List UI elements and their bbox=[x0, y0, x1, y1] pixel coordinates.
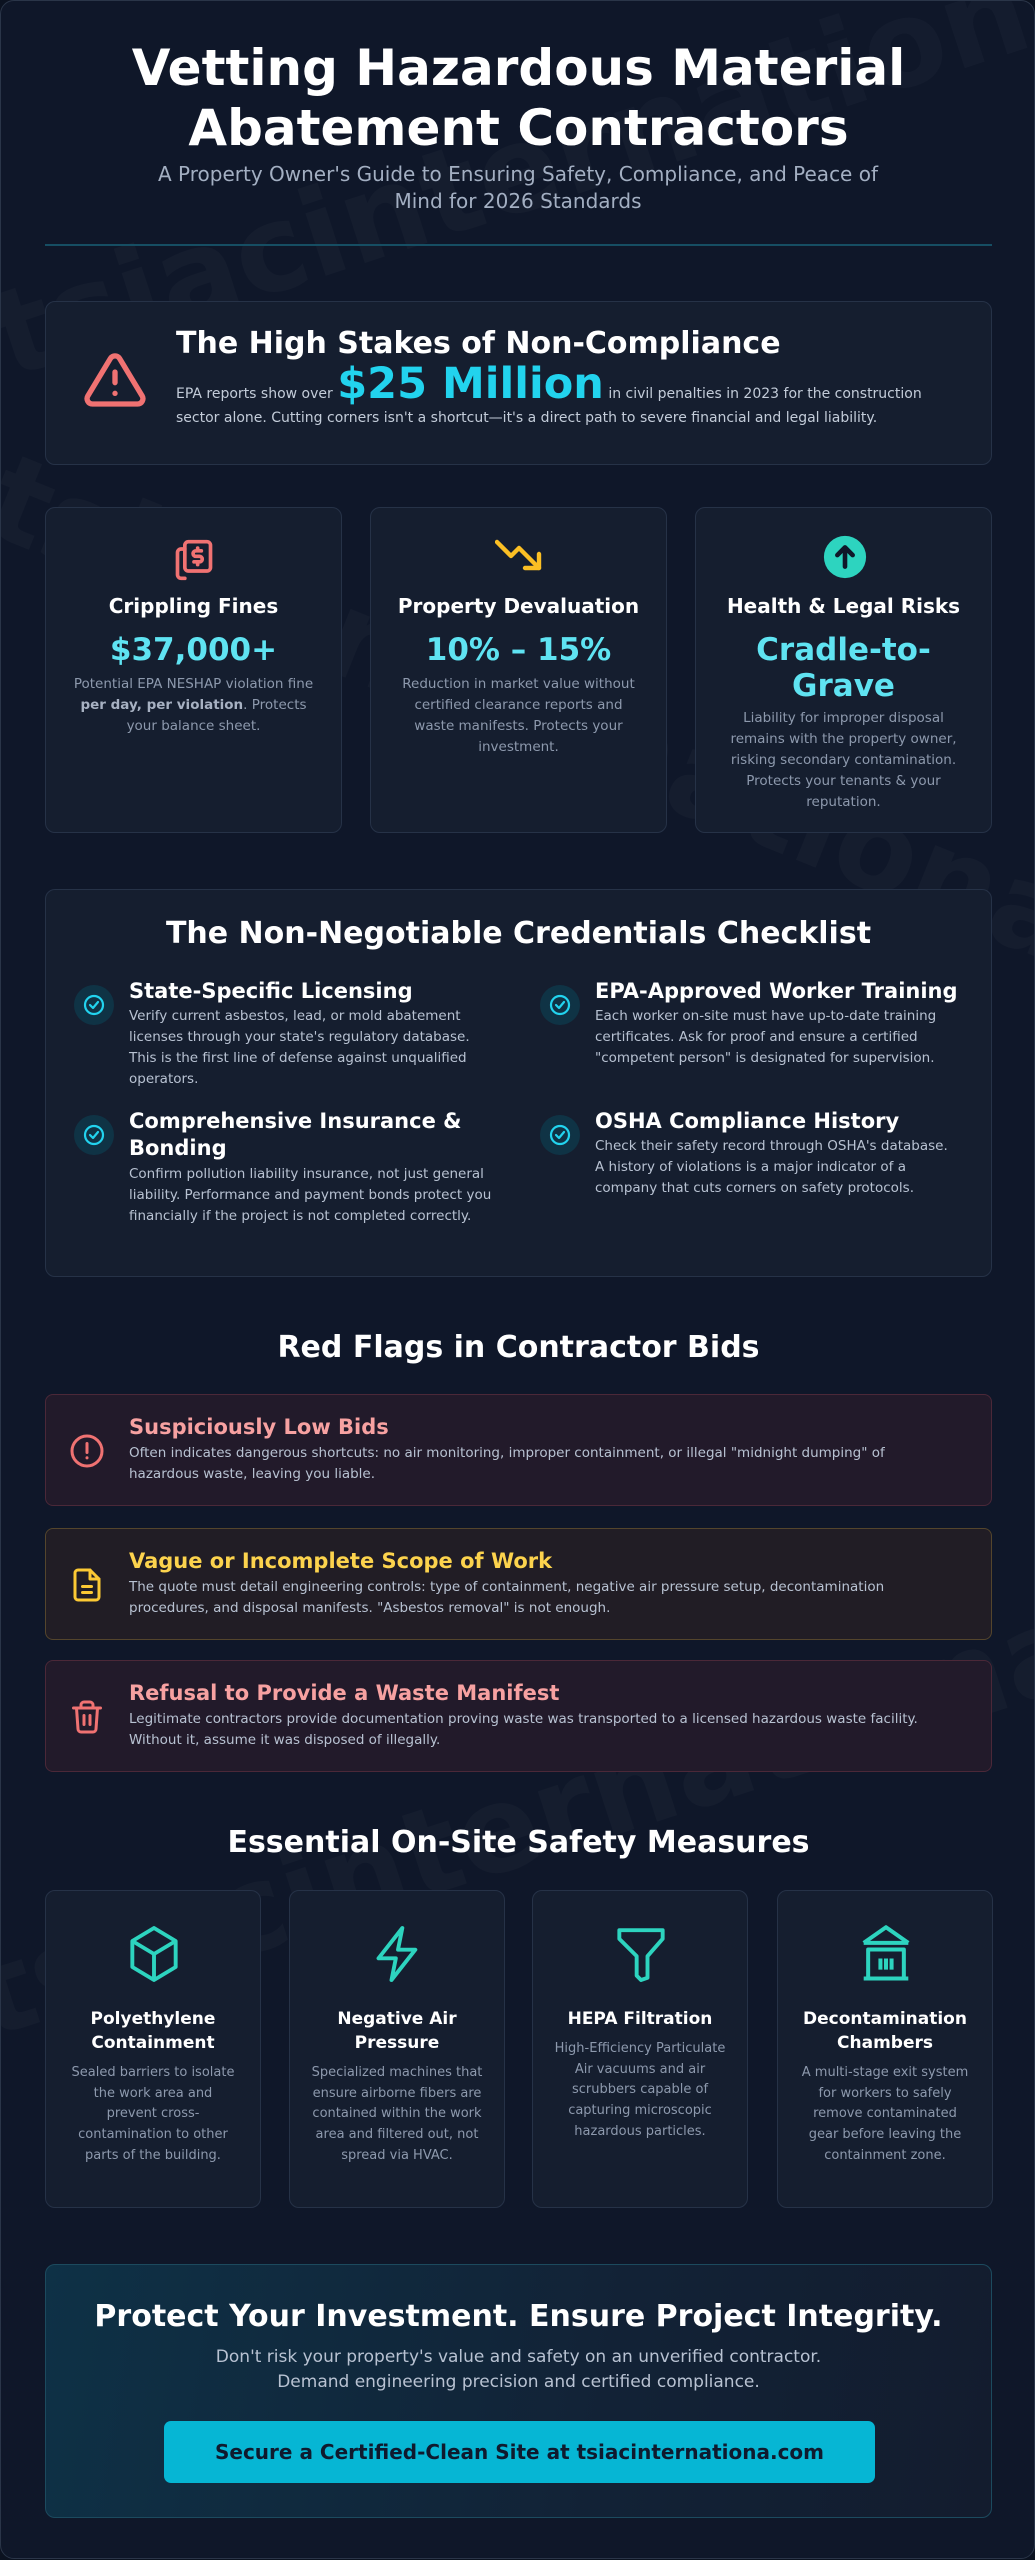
card: polyethylene: Containment bbox=[91, 2033, 215, 2053]
red flag: vague scope: The quote must detail engineering controls: type of containment, negative air pressure setup, decontamination procedures, and disposal manifests. "Asbestos removal" is not enough. bbox=[129, 1579, 884, 1616]
title: Vetting Hazardous Material bbox=[132, 39, 905, 97]
value: Grave bbox=[792, 668, 895, 704]
item: worker training: Each worker on-site must have up-to-date training certificates. Ask for proof and ensure a certified "competent person" is designated for supervision. bbox=[595, 1008, 936, 1066]
value: $37,000+ bbox=[110, 632, 277, 668]
red flag: low bids: Suspiciously Low Bids bbox=[129, 1415, 389, 1439]
text: Potential EPA NESHAP violation fine per day, per violation. Protects your balance sheet. bbox=[74, 676, 313, 734]
panel: high stakes bbox=[45, 301, 992, 465]
value: 10% – 15% bbox=[426, 632, 611, 668]
item: worker training: EPA-Approved Worker Training bbox=[595, 979, 958, 1003]
heading: The High Stakes of Non-Compliance bbox=[176, 326, 781, 361]
text bbox=[216, 2347, 821, 2392]
heading: red flags: Red Flags in Contractor Bids bbox=[277, 1330, 760, 1365]
card: negative air: Negative Air bbox=[337, 2009, 457, 2029]
item: licensing bbox=[74, 979, 470, 1087]
item: worker training bbox=[540, 979, 958, 1066]
red flag: waste manifest: Refusal to Provide a Waste Manifest bbox=[129, 1681, 559, 1705]
card: decontamination: Chambers bbox=[837, 2033, 933, 2053]
panel: credentials checklist bbox=[45, 889, 992, 1277]
title: Health & Legal Risks bbox=[727, 594, 960, 618]
panel: call to action bbox=[45, 2264, 992, 2518]
card: negative air: Pressure bbox=[355, 2033, 439, 2053]
text block: EPA reports show over $25 Million in civil penalties in 2023 for the construction sector alone. Cutting corners isn't a shortcut—it's a direct path to severe financial and legal liability. bbox=[176, 359, 922, 426]
panel: crippling fines bbox=[45, 507, 342, 833]
panel: property devaluation bbox=[370, 507, 667, 833]
item: insurance bbox=[74, 1109, 491, 1224]
item: osha: Check their safety record through OSHA's database. A history of violations is a major indicator of a company that cuts corners on safety protocols. bbox=[595, 1138, 948, 1196]
item: insurance: Confirm pollution liability insurance, not just general liability. Performance and payment bonds protect you financially if the project is not completed correctly. bbox=[129, 1166, 491, 1224]
card: decontamination: Decontamination bbox=[803, 2009, 967, 2029]
button: Secure a Certified-Clean Site at tsiacinternationa.com bbox=[215, 2440, 824, 2464]
text: Demand engineering precision and certified compliance. bbox=[277, 2372, 760, 2392]
card: decontamination bbox=[777, 1890, 993, 2208]
item: licensing: Verify current asbestos, lead, or mold abatement licenses through your state's regulatory database. This is the first line of defense against unqualified operators. bbox=[129, 1008, 470, 1087]
card: polyethylene bbox=[45, 1890, 261, 2208]
item: osha: OSHA Compliance History bbox=[595, 1109, 899, 1133]
red flag: vague scope: Vague or Incomplete Scope of Work bbox=[129, 1549, 552, 1573]
red flag: waste manifest: Legitimate contractors provide documentation proving waste was transported to a licensed hazardous waste facility. Without it, assume it was disposed of illegally. bbox=[129, 1711, 918, 1748]
card: hepa: High-Efficiency Particulate Air vacuums and air scrubbers capable of capturing microscopic hazardous particles. bbox=[555, 2041, 725, 2139]
icon: trending down bbox=[495, 540, 542, 570]
card: negative air bbox=[289, 1890, 505, 2208]
value: Cradle-to- bbox=[756, 632, 931, 668]
icon: warning triangle bbox=[84, 353, 146, 407]
item: licensing: State-Specific Licensing bbox=[129, 979, 413, 1003]
item: osha bbox=[540, 1109, 948, 1196]
text: Reduction in market value without certified clearance reports and waste manifests. Protects your investment. bbox=[402, 676, 635, 755]
subtitle: A Property Owner's Guide to Ensuring Safety, Compliance, and Peace of Mind for 2026 Standards bbox=[158, 162, 878, 213]
item: insurance: Comprehensive Insurance & Bonding bbox=[129, 1109, 461, 1160]
title: Crippling Fines bbox=[109, 594, 278, 618]
value bbox=[756, 632, 931, 704]
red flag: low bids bbox=[45, 1394, 992, 1506]
button bbox=[164, 2421, 875, 2483]
title: Abatement Contractors bbox=[188, 99, 849, 157]
title: Property Devaluation bbox=[398, 594, 639, 618]
heading: safety measures: Essential On-Site Safety Measures bbox=[227, 1825, 810, 1860]
card: hepa: HEPA Filtration bbox=[568, 2009, 712, 2029]
icon: up arrow circle bbox=[824, 536, 866, 578]
red flag: low bids: Often indicates dangerous shortcuts: no air monitoring, improper containment, or illegal "midnight dumping" of hazardous waste, leaving you liable. bbox=[129, 1445, 885, 1482]
icon: money bag bbox=[176, 540, 212, 580]
heading: Protect Your Investment. Ensure Project Integrity. bbox=[94, 2299, 943, 2334]
red flag: waste manifest bbox=[45, 1660, 992, 1772]
card: negative air: Specialized machines that ensure airborne fibers are contained within the work area and filtered out, not spread via HVAC. bbox=[312, 2065, 482, 2163]
red flag: vague scope bbox=[45, 1528, 992, 1640]
card: hepa bbox=[532, 1890, 748, 2208]
panel: health & legal bbox=[695, 507, 992, 833]
heading: The Non-Negotiable Credentials Checklist bbox=[166, 916, 871, 951]
text: Don't risk your property's value and safety on an unverified contractor. bbox=[216, 2347, 821, 2367]
card: polyethylene: Polyethylene bbox=[91, 2009, 215, 2029]
title bbox=[132, 39, 905, 157]
card: decontamination: A multi-stage exit system for workers to safely remove contaminated gear before leaving the containment zone. bbox=[802, 2065, 968, 2163]
card: polyethylene: Sealed barriers to isolate the work area and prevent cross-contamination to other parts of the building. bbox=[72, 2065, 234, 2163]
text: Liability for improper disposal remains with the property owner, risking secondary contamination. Protects your tenants & your reputation. bbox=[730, 710, 957, 810]
